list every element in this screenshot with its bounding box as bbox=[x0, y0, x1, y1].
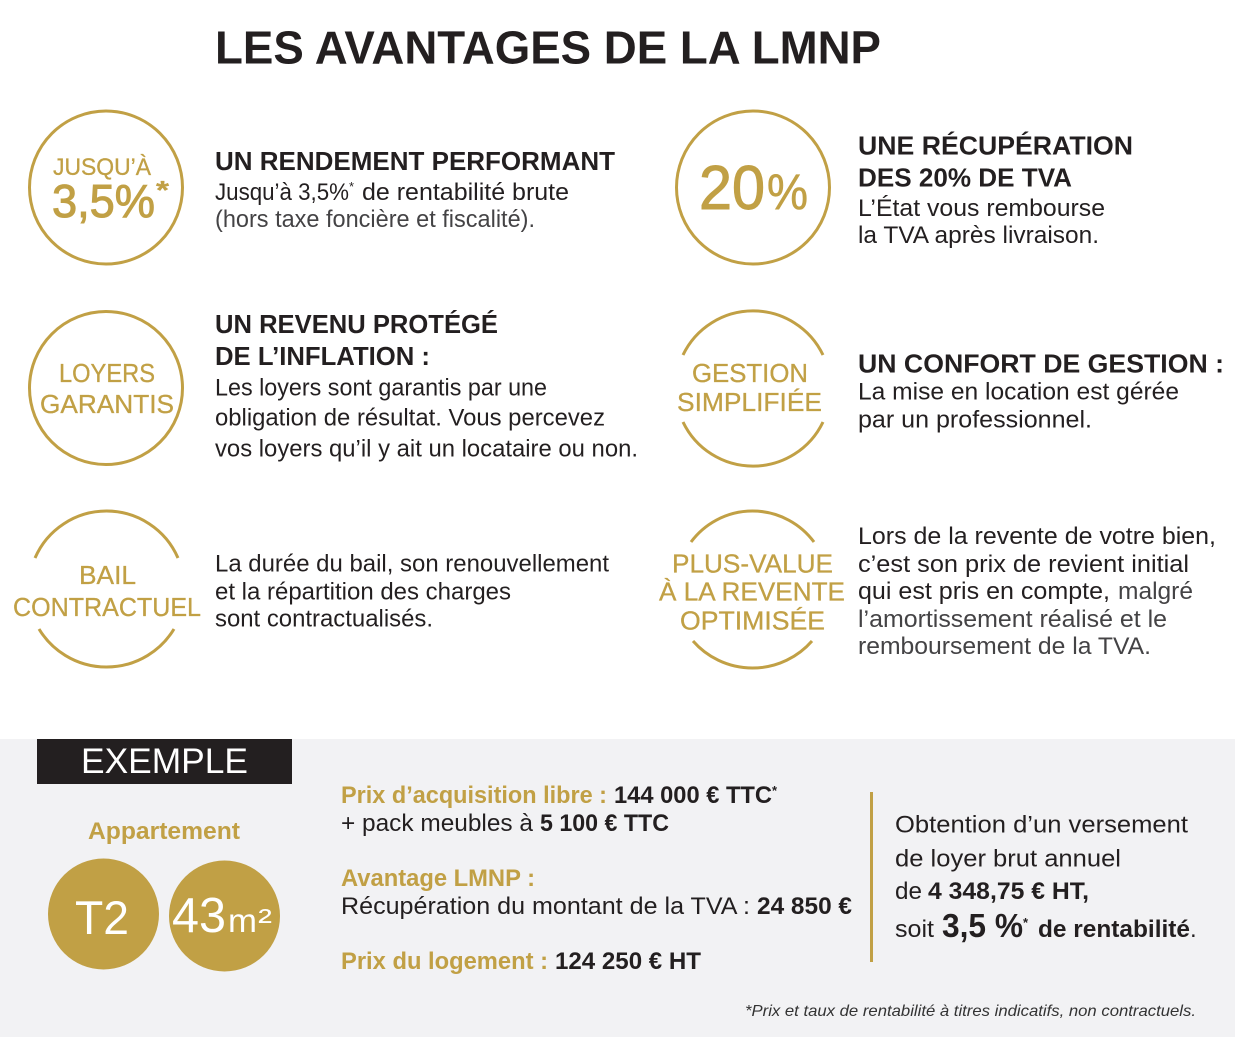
heading: UN REVENU PROTÉGÉ bbox=[215, 309, 498, 339]
icon: badge gestion simplifiée: SIMPLIFIÉE bbox=[677, 387, 822, 417]
text block: obligation de résultat. Vous percevez bbox=[215, 404, 605, 432]
text block: de rentabilité brute bbox=[362, 179, 569, 206]
text block: La durée du bail, son renouvellement bbox=[215, 550, 609, 578]
heading: UN CONFORT DE GESTION : bbox=[858, 348, 1224, 378]
text block: * bbox=[349, 179, 354, 194]
text block: prix d'acquisition: + pack meubles à bbox=[341, 810, 534, 837]
title: LES AVANTAGES DE LA LMNP bbox=[215, 22, 881, 74]
text block bbox=[858, 378, 1179, 434]
text block bbox=[215, 179, 569, 233]
text block: avantage LMNP bbox=[341, 865, 852, 920]
icon: badge 20%: 20 bbox=[699, 154, 765, 223]
icon: badge gestion simplifiée bbox=[677, 311, 823, 466]
text block: rentabilité: soit bbox=[895, 916, 934, 943]
icon: badge loyers garantis: GARANTIS bbox=[40, 389, 174, 419]
panel: rendement performant bbox=[30, 111, 615, 264]
text block: sont contractualisés. bbox=[215, 606, 433, 632]
panel: bail contractuel bbox=[13, 511, 609, 667]
icon: badge 3,5%: * bbox=[156, 175, 170, 205]
text block bbox=[215, 550, 609, 632]
text block: vos loyers qu’il y ait un locataire ou non. bbox=[215, 436, 638, 462]
text block: prix d'acquisition bbox=[341, 782, 778, 837]
icon: badge 3,5%: JUSQU’À bbox=[53, 154, 151, 181]
icon: badge 20%: % bbox=[767, 164, 808, 220]
heading: exemple: EXEMPLE bbox=[81, 742, 248, 781]
icon: badge bail contractuel bbox=[13, 511, 201, 667]
icon: disc 43 m² bbox=[169, 860, 280, 972]
icon: disc T2: T2 bbox=[75, 891, 129, 944]
text block: rentabilité: Obtention d’un versement bbox=[895, 812, 1188, 838]
heading: exemple bbox=[37, 739, 292, 784]
text block: La mise en location est gérée bbox=[858, 378, 1179, 406]
heading bbox=[215, 309, 498, 371]
heading: DES 20% DE TVA bbox=[858, 162, 1072, 192]
text block: rentabilité bbox=[895, 812, 1197, 944]
icon: disc 43 m²: 43 bbox=[172, 889, 226, 943]
text block: rentabilité: * bbox=[1023, 915, 1029, 930]
icon: badge 20% bbox=[676, 111, 830, 264]
icon: disc T2 bbox=[48, 858, 159, 970]
heading: UNE RÉCUPÉRATION bbox=[858, 130, 1133, 160]
text block: Lors de la revente de votre bien, bbox=[858, 523, 1216, 550]
text block: Les loyers sont garantis par une bbox=[215, 374, 547, 402]
text block: l’amortissement réalisé et le bbox=[858, 606, 1167, 633]
text block: prix du logement: Prix du logement : bbox=[341, 948, 548, 975]
panel: plus-value bbox=[659, 511, 1216, 668]
text block: rentabilité: 4 348,75 € HT, bbox=[928, 878, 1089, 905]
icon: badge loyers garantis bbox=[30, 312, 182, 464]
icon: badge bail contractuel: CONTRACTUEL bbox=[13, 592, 201, 622]
icon: badge gestion simplifiée: GESTION bbox=[692, 358, 808, 388]
text block: remboursement de la TVA. bbox=[858, 633, 1151, 660]
panel: récupération TVA bbox=[676, 111, 1133, 264]
icon: disc 43 m²: ² bbox=[258, 902, 272, 939]
text block: prix d'acquisition: 144 000 € TTC bbox=[614, 782, 772, 809]
text block: rentabilité: de rentabilité bbox=[1038, 916, 1190, 943]
panel: confort de gestion bbox=[677, 311, 1224, 466]
panel: revenu protégé bbox=[30, 309, 638, 464]
icon: badge plus-value: À LA REVENTE bbox=[659, 576, 845, 606]
text block: Jusqu’à 3,5% bbox=[215, 179, 349, 206]
text block: rentabilité: de loyer brut annuel bbox=[895, 846, 1121, 872]
icon: badge plus-value bbox=[659, 511, 845, 668]
text block bbox=[215, 374, 638, 462]
text block bbox=[858, 523, 1216, 660]
icon: badge bail contractuel: BAIL bbox=[79, 560, 136, 590]
text block: (hors taxe foncière et fiscalité). bbox=[215, 206, 535, 233]
footnote: *Prix et taux de rentabilité à titres indicatifs, non contractuels. bbox=[745, 1003, 1196, 1020]
text block: avantage LMNP: 24 850 € bbox=[757, 893, 852, 920]
heading: DE L’INFLATION : bbox=[215, 341, 430, 371]
text block: avantage LMNP: Récupération du montant de la TVA : bbox=[341, 893, 750, 920]
icon: badge loyers garantis: LOYERS bbox=[59, 358, 155, 388]
text block: avantage LMNP: Avantage LMNP : bbox=[341, 865, 535, 892]
heading bbox=[858, 130, 1133, 192]
text block: prix d'acquisition: 5 100 € TTC bbox=[540, 810, 669, 837]
text block: rentabilité: . bbox=[1190, 916, 1197, 943]
text block: par un professionnel. bbox=[858, 406, 1092, 434]
text block: c’est son prix de revient initial bbox=[858, 551, 1189, 578]
text block bbox=[858, 195, 1105, 249]
text block: malgré bbox=[1118, 578, 1193, 605]
text block: prix du logement: 124 250 € HT bbox=[555, 948, 701, 975]
text block: qui est pris en compte, bbox=[858, 578, 1110, 605]
text block: rentabilité: 3,5 % bbox=[942, 907, 1023, 944]
panel: exemple bbox=[0, 739, 1235, 1037]
text block: L’État vous rembourse bbox=[858, 195, 1105, 222]
text block: la TVA après livraison. bbox=[858, 222, 1099, 249]
text block: rentabilité: de bbox=[895, 878, 922, 905]
text block: prix d'acquisition: Prix d’acquisition libre : bbox=[341, 782, 607, 809]
text block: prix du logement bbox=[341, 948, 701, 975]
text block: et la répartition des charges bbox=[215, 578, 511, 606]
heading: UN RENDEMENT PERFORMANT bbox=[215, 146, 615, 176]
text block: prix d'acquisition: * bbox=[772, 783, 778, 798]
icon: badge 3,5% bbox=[30, 111, 182, 264]
icon: badge plus-value: OPTIMISÉE bbox=[680, 606, 825, 636]
icon: disc 43 m²: m bbox=[228, 902, 257, 939]
label: appartement: Appartement bbox=[88, 818, 240, 845]
icon: badge plus-value: PLUS-VALUE bbox=[672, 548, 833, 578]
icon: badge 3,5%: 3,5% bbox=[52, 175, 155, 227]
